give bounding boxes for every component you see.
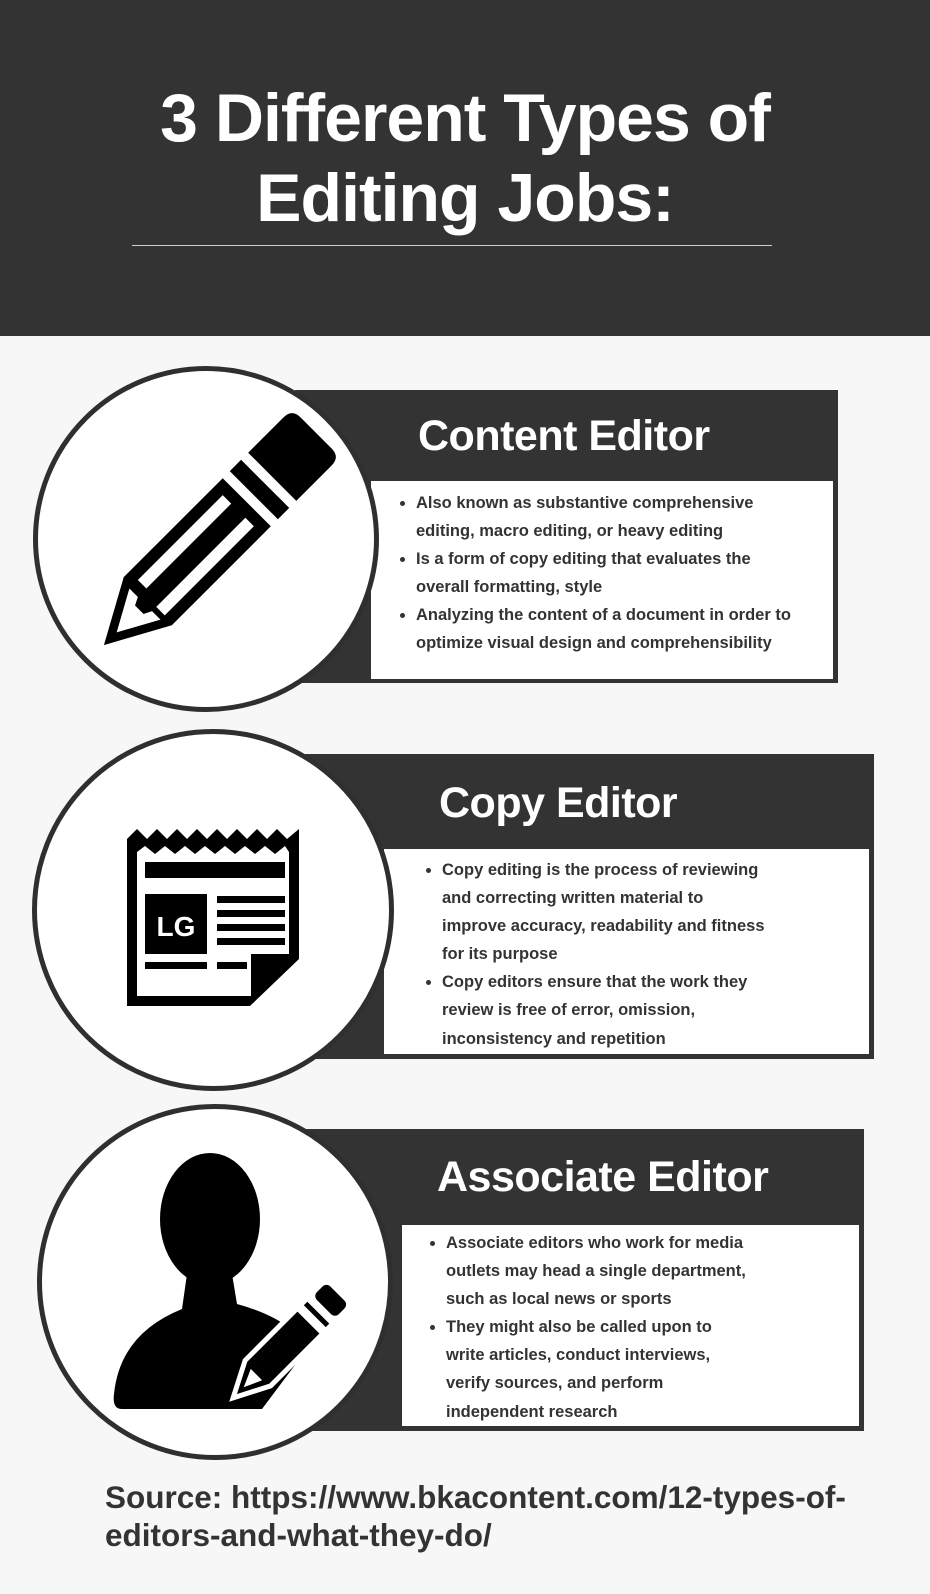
text block: content editor: Is a form of copy editing that evaluates the <box>416 550 751 568</box>
text block: associate editor <box>402 1225 859 1426</box>
icon: pencil circle <box>33 366 379 712</box>
text block: copy editor: improve accuracy, readability and fitness <box>442 917 764 935</box>
title: Editing Jobs: <box>256 160 674 236</box>
title: 3 Different Types of <box>160 80 770 156</box>
panel: copy editor <box>305 754 874 1059</box>
icon: person with pencil circle <box>37 1104 393 1460</box>
panel: associate editor <box>305 1129 864 1431</box>
text block: associate editor: independent research <box>446 1403 617 1421</box>
source text <box>105 1479 846 1553</box>
heading: copy editor: Copy Editor <box>439 779 677 827</box>
text block: associate editor: They might also be called upon to <box>446 1318 712 1336</box>
text block: associate editor: verify sources, and perform <box>446 1374 663 1392</box>
text block: content editor: Analyzing the content of a document in order to <box>416 606 791 624</box>
text block: associate editor: such as local news or sports <box>446 1290 672 1308</box>
icon: newspaper circle: LG <box>157 911 195 942</box>
text block: associate editor: outlets may head a single department, <box>446 1262 746 1280</box>
text block: content editor <box>371 481 833 679</box>
heading: content editor: Content Editor <box>418 412 710 460</box>
title <box>160 80 772 236</box>
text block: copy editor: review is free of error, omission, <box>442 1001 695 1019</box>
heading: associate editor: Associate Editor <box>437 1153 768 1201</box>
text block: content editor: editing, macro editing, or heavy editing <box>416 522 723 540</box>
text block: content editor: Also known as substantive comprehensive <box>416 494 753 512</box>
source text: Source: https://www.bkacontent.com/12-types-of- <box>105 1479 846 1515</box>
text block: copy editor: Copy editing is the process of reviewing <box>442 861 758 879</box>
text block: associate editor: Associate editors who work for media <box>446 1234 743 1252</box>
text block: copy editor <box>384 849 869 1054</box>
text block: associate editor: write articles, conduct interviews, <box>446 1346 710 1364</box>
icon: newspaper circle <box>32 729 394 1091</box>
text block: copy editor: for its purpose <box>442 945 558 963</box>
text block: content editor: overall formatting, style <box>416 578 602 596</box>
text block: copy editor: inconsistency and repetition <box>442 1030 666 1048</box>
source text: editors-and-what-they-do/ <box>105 1517 492 1553</box>
text block: copy editor: and correcting written material to <box>442 889 703 907</box>
text block: content editor: optimize visual design and comprehensibility <box>416 634 772 652</box>
text block: copy editor: Copy editors ensure that the work they <box>442 973 747 991</box>
panel: content editor <box>295 390 838 683</box>
header banner <box>0 0 930 336</box>
